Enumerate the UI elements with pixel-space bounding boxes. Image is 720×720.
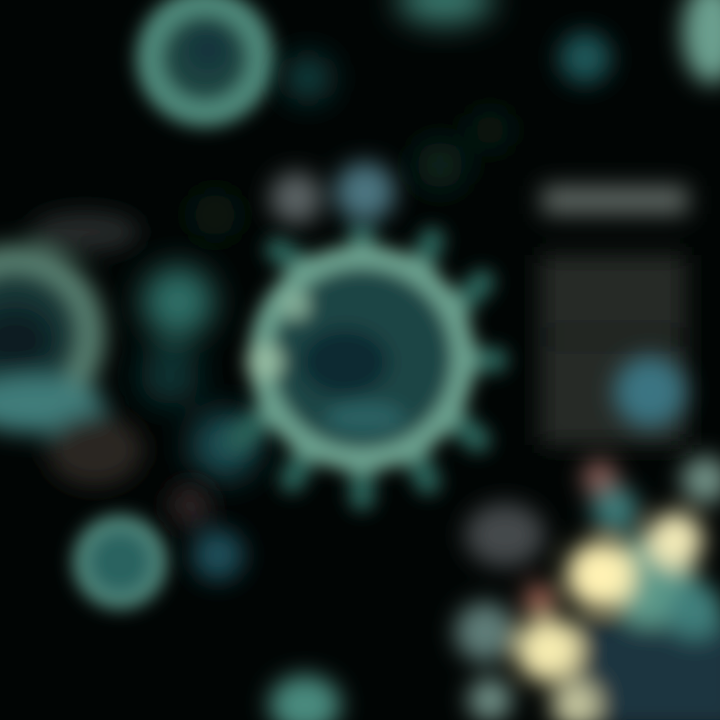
icon: mid-left blobs [140, 266, 259, 479]
icon: bottom right bright cluster [455, 456, 720, 720]
icon: dim green specks [193, 112, 508, 237]
icon: top right corner virus [682, 0, 720, 84]
icon: lower mid blobs [168, 483, 244, 581]
icon: blue blob on text block [614, 356, 686, 428]
icon: left virus [0, 212, 143, 486]
icon: lower left ring [78, 520, 162, 604]
icon: spike heads above main virus [270, 162, 395, 224]
icon: top virus ring [149, 2, 261, 114]
icon: small teal blob by top ring [286, 56, 330, 100]
panel: text block on the right [540, 186, 688, 445]
icon: top right teal blob [559, 32, 611, 84]
heading [542, 186, 688, 214]
icon: top centre blob [397, 0, 493, 24]
icon: main virus [238, 232, 495, 498]
icon: bottom centre blob [269, 675, 341, 720]
